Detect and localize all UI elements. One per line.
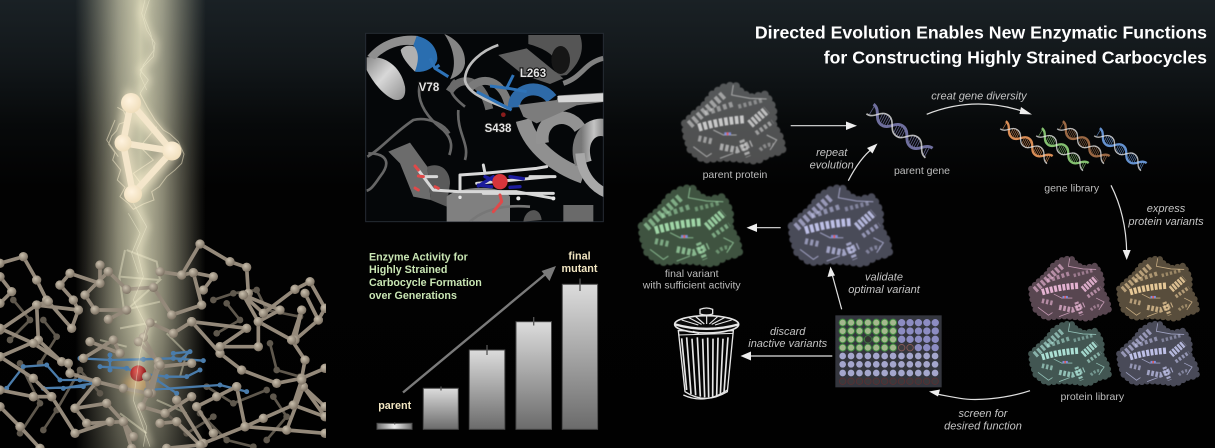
arrow: screen xyxy=(929,390,1030,399)
panel: active site structure xyxy=(366,33,607,222)
gene library xyxy=(1000,121,1147,171)
error bars xyxy=(395,278,580,424)
chart title: Highly Strained xyxy=(369,264,447,276)
protein: validated variant xyxy=(792,188,889,264)
label: express protein variants: express xyxy=(1147,203,1186,215)
title xyxy=(755,22,1207,68)
arrow: discard xyxy=(740,352,832,360)
label: validate optimal variant: validate xyxy=(865,272,903,284)
arrow: protein to gene xyxy=(791,122,857,130)
title: for Constructing Highly Strained Carbocycles xyxy=(824,48,1207,68)
iron atom xyxy=(130,365,146,381)
label: repeat evolution: evolution xyxy=(810,160,854,172)
label: L263: L263 xyxy=(520,68,546,80)
glowing strained carbocycle molecule xyxy=(107,93,184,209)
arrow: to final variant xyxy=(746,224,781,232)
upper right helix and sheets xyxy=(528,35,582,77)
chart title: Carbocycle Formation xyxy=(369,277,482,289)
DNA: parent gene xyxy=(866,104,933,158)
label: final mutant: mutant xyxy=(562,263,598,275)
label: protein library: protein library xyxy=(1060,391,1125,403)
label: discard inactive variants: inactive variants xyxy=(748,338,828,350)
chart title: over Generations xyxy=(369,290,457,302)
label: discard inactive variants: discard xyxy=(770,326,806,338)
chart: enzyme activity over generations xyxy=(369,250,598,429)
title: Directed Evolution Enables New Enzymatic Functions xyxy=(755,22,1207,42)
protein: final variant xyxy=(642,188,739,264)
protein backbone, front layer xyxy=(0,244,325,448)
protein library xyxy=(1031,258,1197,384)
heme sticks xyxy=(418,165,555,198)
bars xyxy=(377,284,598,429)
arrow: express xyxy=(1111,185,1131,260)
chart title: Enzyme Activity for xyxy=(369,252,468,264)
label: parent: parent xyxy=(378,400,412,412)
lightning xyxy=(128,0,155,447)
label: gene library: gene library xyxy=(1044,182,1100,194)
label: screen for desired function: screen for xyxy=(959,408,1009,420)
label: parent gene: parent gene xyxy=(894,165,950,177)
heme, blue xyxy=(7,352,247,393)
label: S438: S438 xyxy=(485,123,512,135)
label: express protein variants: protein variants xyxy=(1127,216,1204,228)
protein backbone, back layer xyxy=(10,250,300,447)
label: creat gene diversity: creat gene diversity xyxy=(931,90,1028,102)
lower right helices xyxy=(523,118,607,193)
light beam xyxy=(75,0,206,448)
panel: reaction illustration with light beam xyxy=(0,0,325,448)
beta sheet xyxy=(518,93,603,123)
central helix xyxy=(449,81,509,109)
arrow: creat gene diversity xyxy=(927,104,1032,114)
label: V78: V78 xyxy=(419,82,440,94)
ribbon helix upper left xyxy=(367,57,405,100)
protein: parent xyxy=(685,85,783,161)
thin loops xyxy=(367,80,466,191)
label: final variant: with sufficient activity xyxy=(642,280,741,292)
well plate xyxy=(835,315,942,387)
arrow: validate xyxy=(828,266,842,309)
label: screen for desired function: desired function xyxy=(944,420,1022,432)
arrow: repeat evolution xyxy=(848,144,878,181)
label: validate optimal variant: optimal variant xyxy=(848,284,921,296)
label: final mutant: final xyxy=(568,250,591,262)
icon: trash can xyxy=(675,308,739,399)
trend arrow xyxy=(403,266,556,392)
heme helix left xyxy=(388,143,431,200)
label: repeat evolution: repeat xyxy=(816,147,848,159)
blue residue sticks xyxy=(430,58,527,110)
label: parent protein: parent protein xyxy=(703,169,768,181)
label: final variant: final variant xyxy=(665,268,719,280)
